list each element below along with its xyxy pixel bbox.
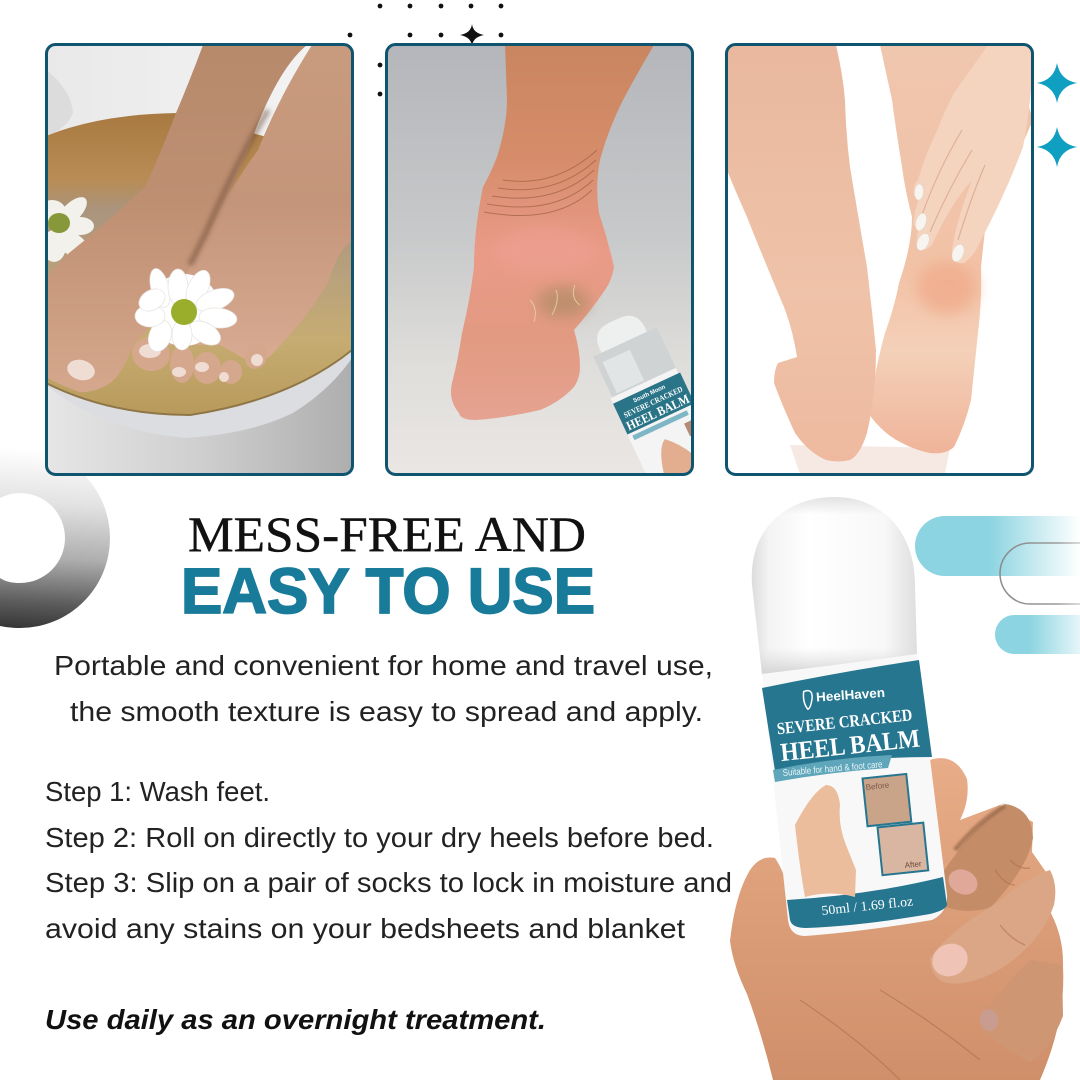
tagline: Suitable for hand & foot care (782, 759, 883, 779)
towel under bowl (73, 360, 351, 473)
sole pink heel (917, 262, 977, 314)
hand (914, 45, 1033, 263)
reflection (790, 445, 950, 474)
heel cracks (530, 285, 580, 322)
left daisy (48, 197, 94, 262)
fingernails (913, 184, 966, 263)
product name (776, 705, 921, 767)
steps list: Step 3: Slip on a pair of socks to lock in moisture and (45, 867, 732, 898)
finger separations (922, 130, 985, 240)
before thumbnail (863, 774, 911, 826)
hands illustration (795, 785, 856, 897)
heel (451, 45, 654, 420)
middle finger (930, 870, 1055, 984)
decorative ring (0, 448, 110, 628)
small product bottle: HEEL BALM (624, 391, 692, 433)
brand logo (803, 685, 886, 710)
brand logo: HeelHaven (816, 685, 886, 705)
upper finger shadow (955, 806, 1005, 850)
right foot (168, 46, 351, 359)
product name: HEEL BALM (779, 724, 921, 767)
panel: legs and hand photo (726, 44, 1033, 474)
bottle cap (752, 497, 917, 674)
palm and thumb (730, 758, 1063, 1080)
towel roll (48, 72, 73, 135)
title: MESS-FREE AND (188, 506, 586, 562)
intro text (54, 650, 713, 727)
right foot toes (132, 337, 266, 384)
teal upper label (762, 660, 932, 771)
title (181, 506, 595, 627)
hand holding product (730, 758, 1063, 1080)
sole dark patch (537, 286, 589, 318)
small product bottle: SEVERE CRACKED (622, 384, 684, 420)
upper finger (943, 804, 1033, 911)
steps list: avoid any stains on your bedsheets and blanket (45, 913, 685, 944)
bottle body (762, 654, 947, 936)
steps list (45, 776, 732, 944)
intro text: the smooth texture is easy to spread and apply. (70, 696, 703, 727)
usage note: Use daily as an overnight treatment. (45, 1004, 546, 1035)
left leg (727, 45, 876, 462)
title: EASY TO USE (181, 555, 595, 627)
small product bottle (594, 316, 691, 473)
small product bottle: South Moon (633, 384, 667, 404)
main daisy (135, 266, 238, 355)
left foot (46, 45, 307, 392)
right leg and sole (870, 45, 1033, 453)
teal sparkles (1037, 63, 1077, 167)
before thumbnail: Before (865, 781, 890, 792)
product bottle (752, 497, 947, 936)
after thumbnail: After (904, 859, 922, 870)
intro text: Portable and convenient for home and travel use, (54, 650, 713, 681)
panel: cracked heel photo (385, 43, 694, 476)
toenails (65, 344, 263, 383)
brown bowl interior (46, 113, 352, 415)
skin wrinkles (484, 150, 597, 216)
suitable ribbon (773, 755, 892, 782)
decorative blue pills (915, 516, 1080, 654)
volume text: 50ml / 1.69 fl.oz (821, 893, 914, 918)
nail three (977, 1007, 1001, 1033)
after thumbnail (878, 823, 928, 875)
dot grid with black sparkle (348, 4, 503, 96)
panel: feet in bowl photo (38, 44, 352, 474)
steps list: Step 2: Roll on directly to your dry heels before bed. (45, 822, 714, 853)
nail one (944, 865, 982, 899)
white bowl base (48, 352, 351, 438)
product name: SEVERE CRACKED (776, 705, 913, 738)
foot shadow (190, 110, 268, 265)
steps list: Step 1: Wash feet. (45, 776, 270, 807)
finger creases (800, 860, 1030, 1080)
nail two (927, 938, 973, 982)
teal lower band (787, 877, 947, 928)
lower finger (980, 960, 1063, 1062)
